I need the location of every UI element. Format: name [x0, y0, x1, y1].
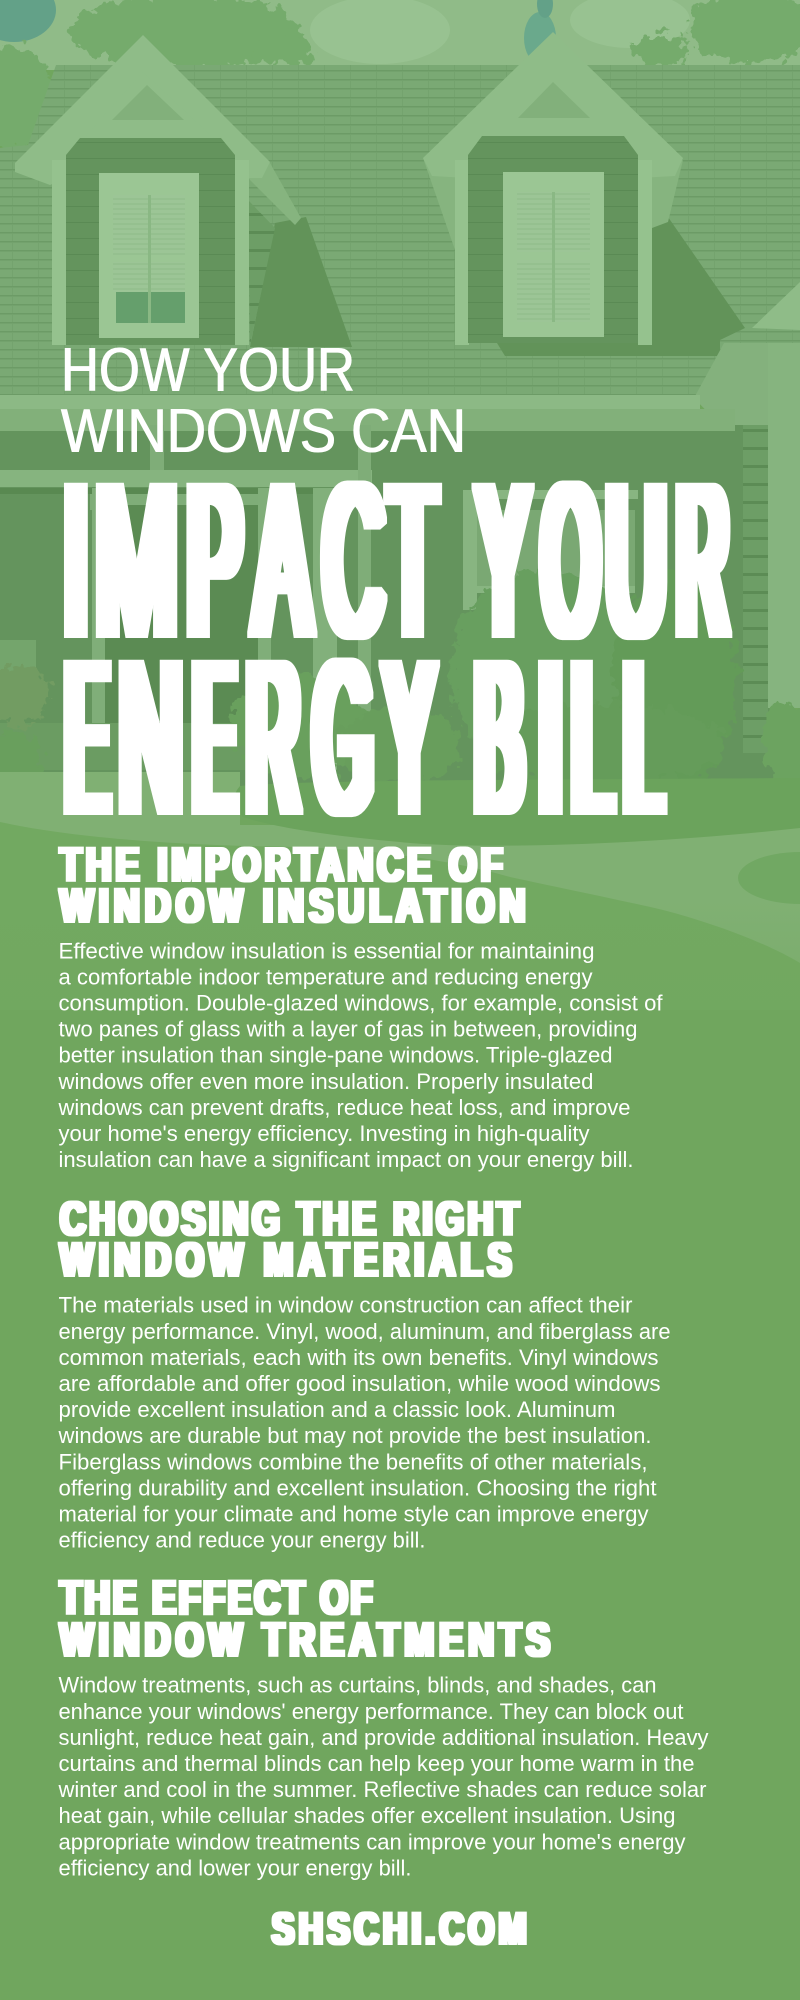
title main line: Y	[478, 439, 529, 681]
panel: window treatments	[57, 1571, 708, 1880]
heading: THE EFFECT OF	[60, 1571, 372, 1624]
title main line: R	[247, 616, 299, 858]
body text: better insulation than single-pane windows. Triple-glazed	[58, 1043, 612, 1068]
background photo: house with green tint	[0, 0, 800, 1180]
title main line	[64, 439, 728, 858]
body text: sunlight, reduce heat gain, and provide additional insulation. Heavy	[58, 1725, 708, 1750]
body text: are affordable and offer good insulation, while wood windows	[58, 1371, 660, 1396]
roof with shingles	[0, 65, 800, 395]
body text: energy performance. Vinyl, wood, aluminum, and fiberglass are	[58, 1319, 670, 1344]
website footer: SHSCHI.COM	[272, 1904, 527, 1954]
body text: insulation can have a significant impact on your energy bill.	[58, 1147, 634, 1172]
title	[61, 336, 728, 858]
body text: windows are durable but may not provide the best insulation.	[57, 1423, 651, 1448]
title main line: L	[625, 616, 662, 858]
body text: windows offer even more insulation. Properly insulated	[57, 1069, 593, 1094]
body text: heat gain, while cellular shades offer excellent insulation. Using	[58, 1803, 676, 1828]
body text: Fiberglass windows combine the benefits of other materials,	[58, 1449, 648, 1474]
title main line: U	[606, 439, 666, 681]
body text: your home's energy efficiency. Investing in high-quality	[58, 1121, 590, 1146]
body text: provide excellent insulation and a classic look. Aluminum	[58, 1397, 616, 1422]
body text: Effective window insulation is essential for maintaining	[58, 938, 594, 963]
body text: windows can prevent drafts, reduce heat loss, and improve	[58, 1095, 630, 1120]
heading: WINDOW INSULATION	[60, 879, 525, 932]
heading: WINDOW TREATMENTS	[60, 1613, 550, 1666]
body text: consumption. Double-glazed windows, for example, consist of	[58, 990, 663, 1016]
lawn and walkway	[0, 772, 800, 1180]
title main line: T	[389, 439, 434, 681]
heading: WINDOW MATERIALS	[60, 1233, 511, 1286]
body text: Window treatments, such as curtains, blinds, and shades, can	[58, 1673, 656, 1698]
title main line: I	[64, 439, 88, 681]
body text: winter and cool in the summer. Reflective shades can reduce solar	[57, 1777, 706, 1802]
heading: THE IMPORTANCE OF	[60, 838, 503, 891]
body text: a comfortable indoor temperature and reducing energy	[58, 964, 592, 989]
panel: window materials	[57, 1192, 670, 1553]
body text: appropriate window treatments can improve your home's energy	[58, 1829, 686, 1854]
body text: efficiency and reduce your energy bill.	[58, 1528, 426, 1553]
heading	[60, 1571, 550, 1666]
title main line: E	[66, 616, 108, 858]
shrubs	[0, 570, 800, 790]
left dormer	[15, 35, 301, 345]
title main line: C	[324, 439, 383, 681]
heading: CHOOSING THE RIGHT	[60, 1192, 519, 1245]
sky	[0, 0, 800, 70]
body text: The materials used in window construction can affect their	[58, 1293, 632, 1318]
title main line: N	[119, 616, 182, 858]
title main line: Y	[385, 616, 433, 858]
body text: enhance your windows' energy performance. They can block out	[58, 1699, 684, 1724]
body text: offering durability and excellent insulation. Choosing the right	[58, 1475, 656, 1500]
title intro line	[61, 336, 466, 466]
title main line: O	[542, 439, 598, 681]
body text: material for your climate and home style can improve energy	[58, 1502, 648, 1526]
title main line: A	[255, 439, 310, 681]
body text	[57, 1293, 670, 1553]
trees	[0, 0, 800, 150]
body text: common materials, each with its own benefits. Vinyl windows	[58, 1345, 658, 1370]
lower wall and porch	[0, 343, 800, 805]
body text	[57, 938, 663, 1172]
heading	[60, 838, 525, 932]
body text: curtains and thermal blinds can help keep your home warm in the	[58, 1751, 694, 1776]
body text: two panes of glass with a layer of gas in between, providing	[58, 1017, 638, 1042]
title main line: M	[96, 439, 177, 681]
right gable and gutter	[694, 282, 800, 425]
title intro line: WINDOWS CAN	[61, 397, 466, 466]
title main line: I	[537, 616, 564, 858]
heading	[60, 1192, 519, 1286]
title main line: P	[188, 439, 242, 681]
title main line: E	[194, 616, 235, 858]
panel: window insulation	[57, 838, 663, 1172]
title main line: G	[314, 616, 372, 858]
body text	[57, 1673, 708, 1880]
title main line: B	[475, 616, 523, 858]
title intro line: HOW YOUR	[61, 336, 355, 405]
body text: efficiency and lower your energy bill.	[58, 1855, 412, 1880]
title main line: L	[572, 616, 612, 858]
dormer shadows on the roof	[250, 217, 745, 356]
right dormer	[423, 32, 683, 345]
